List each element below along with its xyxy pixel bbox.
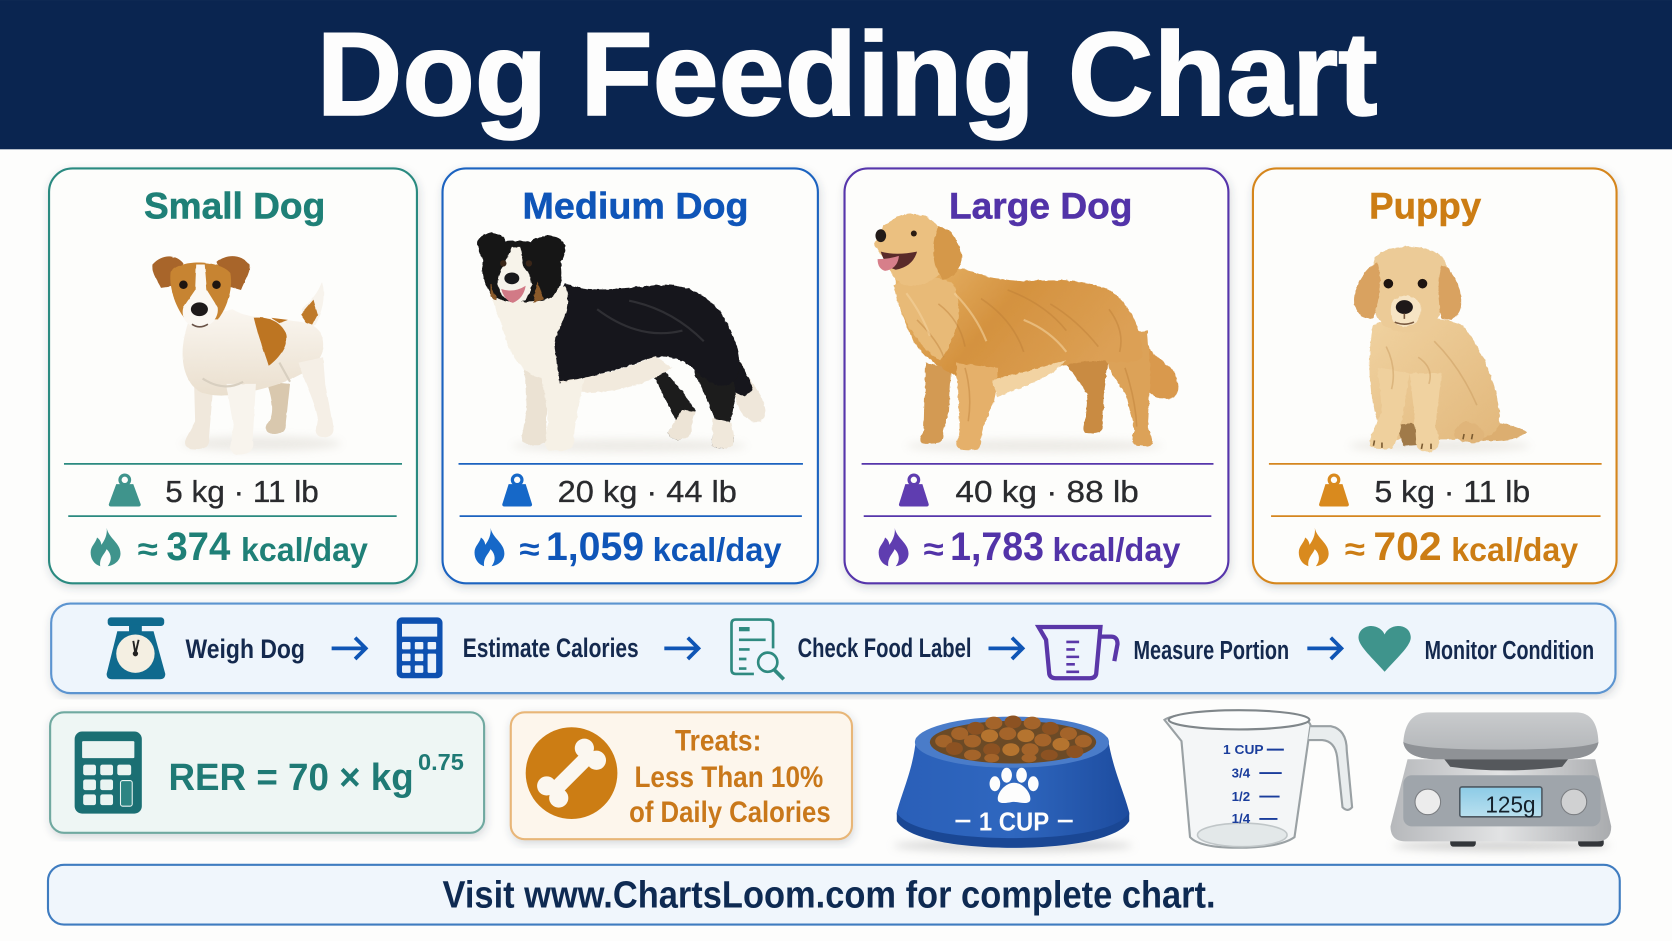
calorie value: ≈ [138,531,158,567]
calorie value: kcal/day [653,532,782,569]
calorie value: ≈ [519,531,540,567]
arrow [988,638,1023,659]
calorie value: kcal/day [1451,532,1579,569]
label: measure portion: Measure Portion [1134,637,1289,665]
header band [0,0,1672,149]
weight text: 5 kg · 11 lb [165,474,319,509]
formula: 0.75 [418,749,464,775]
icon: bone [526,727,617,819]
cup markings: 3/4 [1232,765,1251,780]
icon: weight [109,475,141,507]
illustration: medium dog [478,233,766,452]
panel: small dog [49,168,417,583]
paw [990,768,1039,803]
calorie value: ≈ [923,531,944,567]
icon: kitchen scale [107,617,165,679]
cup markings: 1 CUP [1223,742,1264,757]
cup markings: 1/2 [1232,789,1250,804]
calorie value [923,525,1181,569]
weight text: 20 kg · 44 lb [558,474,737,509]
bowl label: 1 CUP [979,809,1049,837]
calorie value: ≈ [1345,531,1365,567]
panel: puppy [1253,168,1617,583]
icon: heart [1358,626,1411,672]
arrow [332,638,366,659]
panel: medium dog [443,168,818,583]
icon: flame [475,528,504,566]
formula: RER = 70 × kg [168,756,414,799]
label: check food label: Check Food Label [798,633,971,663]
scale readout: 125g [1485,792,1536,818]
illustration: measuring cup [1164,710,1352,848]
icon: weight [899,475,929,507]
calorie value: 374 [166,525,230,569]
heading: small dog: Small Dog [144,185,325,227]
illustration: large dog [874,214,1178,452]
treats text: of Daily Calories [629,796,831,829]
label: estimate calories: Estimate Calories [463,633,639,663]
icon: measuring jug [1039,627,1118,678]
calorie value: 1,059 [546,525,644,569]
icon: calculator [75,732,142,814]
calorie value: kcal/day [1052,532,1181,569]
calorie value [519,525,782,569]
icon: calculator [397,617,443,678]
illustration: digital scale [1390,712,1611,851]
calorie value [138,525,368,569]
arrow [1307,638,1341,659]
calorie value: 1,783 [950,525,1044,569]
heading: medium dog: Medium Dog [523,185,749,227]
call to action text: Visit www.ChartsLoom.com for complete chart. [443,873,1216,916]
treats text [629,725,831,829]
icon: flame [91,528,120,566]
icon: weight [502,475,532,507]
illustration: small dog [152,256,341,455]
icon: food label search [732,620,784,679]
calorie value: 702 [1373,525,1442,569]
panel: RER formula [50,712,484,833]
illustration: puppy [1349,247,1530,452]
cup markings [1223,742,1284,826]
panel: treats [511,712,852,839]
kibble [935,716,1092,762]
icon: flame [1299,528,1329,566]
weight text: 40 kg · 88 lb [955,474,1139,509]
treats text: Treats: [675,725,761,758]
cup markings: 1/4 [1232,811,1251,826]
call to action bar [48,865,1620,925]
icon: flame [879,528,909,566]
treats text: Less Than 10% [634,761,823,794]
illustration: food bowl [894,716,1132,852]
heading: large dog: Large Dog [949,185,1132,227]
title: Dog Feeding Chart [317,9,1378,141]
weight text: 5 kg · 11 lb [1374,474,1530,509]
label: monitor condition: Monitor Condition [1425,637,1594,665]
calorie value [1345,525,1579,569]
panel: feeding process flow [51,604,1615,693]
icon: weight [1319,475,1349,507]
label: weigh dog: Weigh Dog [186,634,305,664]
calorie value: kcal/day [241,532,368,569]
panel: large dog [845,168,1228,583]
heading: puppy: Puppy [1369,185,1481,227]
arrow [664,638,698,659]
